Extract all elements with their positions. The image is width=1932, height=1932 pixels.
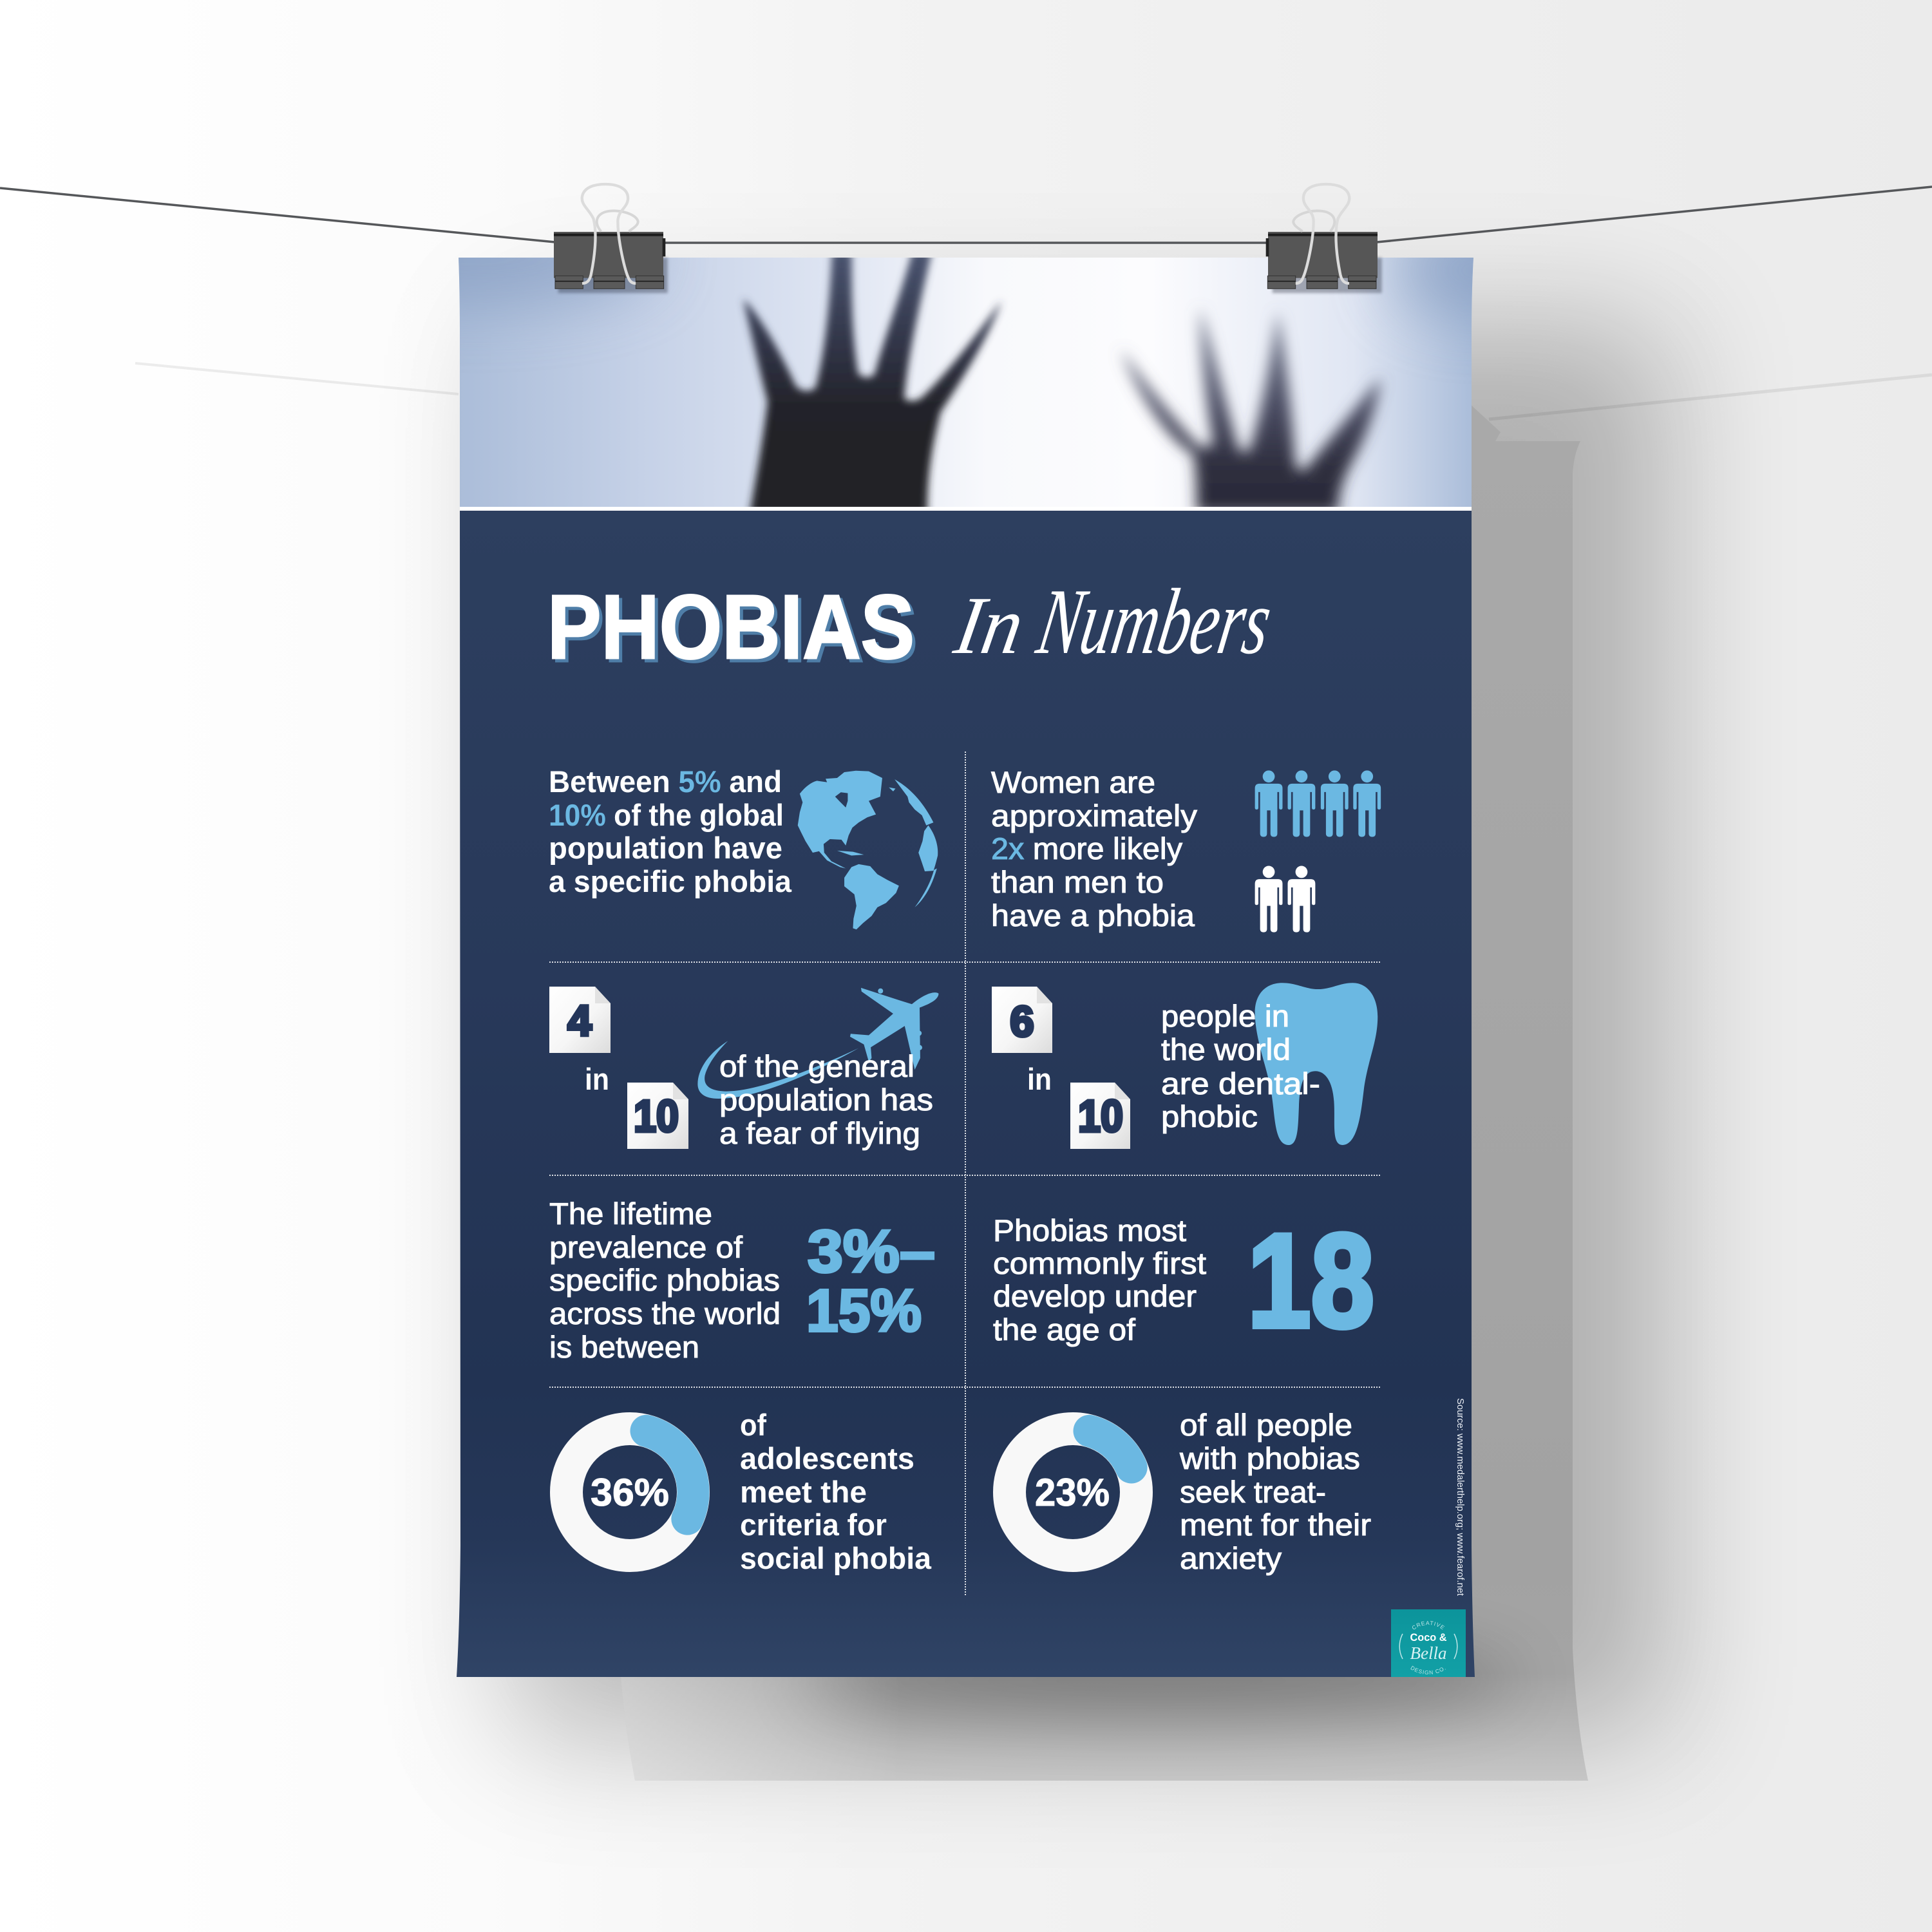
- icon: globe: [798, 771, 938, 929]
- faint wire shadow left: [135, 363, 459, 394]
- panel: women vs men: [991, 765, 1381, 933]
- text: adolescents: [740, 1408, 932, 1575]
- stat: 3% to 15%: [806, 1218, 935, 1344]
- text: adolescents: adolescents: [740, 1441, 914, 1475]
- text: people in the world: people in: [1161, 999, 1289, 1033]
- text: in: in: [585, 1062, 609, 1096]
- card: 10: 10: [634, 1091, 679, 1141]
- text: phobias first develop: the age of: [993, 1312, 1136, 1347]
- logo: Coco and Bella: Coco &: [1410, 1631, 1446, 1643]
- card: 4: 4: [567, 997, 592, 1045]
- left hand: [743, 252, 1001, 513]
- text: between 5% and 10%: population have: [549, 831, 782, 865]
- text: seek treatment: ment for their: [1180, 1508, 1371, 1542]
- wire: [0, 187, 1932, 243]
- panel: fear of flying: [549, 987, 938, 1150]
- text: between 5% and 10%: a specific phobia: [549, 864, 792, 898]
- text: of the general population: a fear of flying: [719, 1116, 920, 1150]
- donut chart 36%: 36%: [591, 1471, 669, 1514]
- panel: dental phobia: [992, 983, 1378, 1149]
- binder clip left: [554, 184, 668, 293]
- text: adolescents: social phobia: [740, 1541, 932, 1575]
- stat: 18: 18: [1247, 1206, 1374, 1355]
- text: between 5% and 10%: 10% of the global: [549, 798, 784, 832]
- text: women are 2x more likely: than men to: [991, 865, 1164, 899]
- white divider under photo: [460, 507, 1472, 511]
- text: between 5% and 10%: [549, 764, 792, 898]
- binder clip right: [1266, 184, 1382, 293]
- title: Numbers: [1030, 569, 1279, 674]
- card: 10: [1070, 1083, 1130, 1149]
- panel: lifetime prevalence: [549, 1197, 935, 1364]
- source note: Source: www.medalerthelp.org; www.fearof.net: [1455, 1398, 1465, 1596]
- text: lifetime prevalence: specific phobias: [549, 1263, 780, 1297]
- text: seek treatment: [1179, 1408, 1371, 1575]
- logo: Coco and Bella: DESIGN CO.: [1410, 1665, 1446, 1674]
- text: seek treatment: with phobias: [1179, 1441, 1360, 1475]
- card: 6: [992, 987, 1052, 1053]
- text: in: in: [1027, 1062, 1052, 1096]
- faint wire shadow right: [1489, 375, 1932, 419]
- text: lifetime prevalence: [549, 1197, 781, 1364]
- text: women are 2x more likely: approximately: [991, 799, 1198, 833]
- text: lifetime prevalence: is between: [549, 1330, 699, 1364]
- text: women are 2x more likely: Women are: [991, 765, 1155, 799]
- stat: 3% to 15%: 3%–: [808, 1218, 935, 1285]
- text: phobias first develop: develop under: [993, 1279, 1197, 1313]
- icon: tooth: [1255, 983, 1378, 1145]
- panel: age of onset: [993, 1206, 1374, 1355]
- title: PHOBIAS: [551, 579, 918, 681]
- text: of the general population: of the general: [719, 1049, 914, 1083]
- donut chart 23%: 23%: [1035, 1471, 1110, 1514]
- text: women are 2x more likely: [991, 765, 1198, 933]
- text: seek treatment: of all people: [1180, 1408, 1352, 1442]
- poster navy panel: [457, 507, 1475, 1677]
- text: people in the world: phobic: [1161, 1099, 1258, 1133]
- donut chart 23%: [1010, 1428, 1136, 1556]
- text: women are 2x more likely: have a phobia: [991, 898, 1195, 933]
- title: PHOBIAS: [547, 576, 914, 677]
- logo: Coco and Bella: Bella: [1410, 1643, 1446, 1663]
- text: adolescents: meet the: [740, 1475, 867, 1509]
- text: phobias first develop: commonly first: [993, 1246, 1206, 1280]
- title: In: [948, 580, 1030, 671]
- text: phobias first develop: [993, 1213, 1206, 1347]
- stat: 3% to 15%: 15%: [806, 1277, 922, 1344]
- title: [547, 569, 1279, 681]
- text: lifetime prevalence: across the world: [549, 1296, 781, 1331]
- text: seek treatment: anxiety: [1180, 1541, 1282, 1575]
- panel: global population: [549, 764, 938, 929]
- grid dividers: [549, 752, 1381, 1596]
- logo: Coco and Bella: [1391, 1609, 1466, 1677]
- card: 10: [627, 1083, 688, 1149]
- logo: Coco and Bella: CREATIVE: [1412, 1621, 1445, 1629]
- card: 6: 6: [1010, 998, 1034, 1046]
- text: of the general population: [719, 1049, 933, 1150]
- right hand: [1121, 308, 1381, 513]
- text: adolescents: criteria for: [740, 1508, 887, 1542]
- donut chart 36%: [567, 1428, 693, 1556]
- panel: adolescents: [567, 1408, 932, 1575]
- card: 4: [549, 987, 611, 1053]
- soft poster shadow: [509, 322, 1668, 1739]
- text: women are 2x more likely: 2x more likely: [991, 831, 1183, 866]
- icon: four blue figures: [1255, 770, 1381, 837]
- text: people in the world: the world: [1161, 1032, 1291, 1066]
- icon: two white figures: [1255, 866, 1315, 933]
- poster sheet: [457, 258, 1475, 1677]
- card: 10: 10: [1078, 1091, 1123, 1141]
- text: between 5% and 10%: Between 5% and: [549, 764, 782, 799]
- panel: seek treatment: [1010, 1408, 1371, 1575]
- text: lifetime prevalence: The lifetime: [549, 1197, 712, 1231]
- text: people in the world: [1161, 999, 1320, 1133]
- text: seek treatment: seek treat-: [1180, 1475, 1326, 1509]
- hard cast shadow of poster: [621, 402, 1588, 1783]
- text: people in the world: are dental-: [1161, 1066, 1320, 1101]
- text: phobias first develop: Phobias most: [993, 1213, 1186, 1247]
- text: of the general population: population has: [719, 1083, 933, 1117]
- photo of hands behind frosted glass: [459, 258, 1473, 507]
- text: adolescents: of: [740, 1408, 766, 1442]
- icon: airplane with swoosh: [697, 988, 938, 1099]
- text: lifetime prevalence: prevalence of: [549, 1230, 743, 1264]
